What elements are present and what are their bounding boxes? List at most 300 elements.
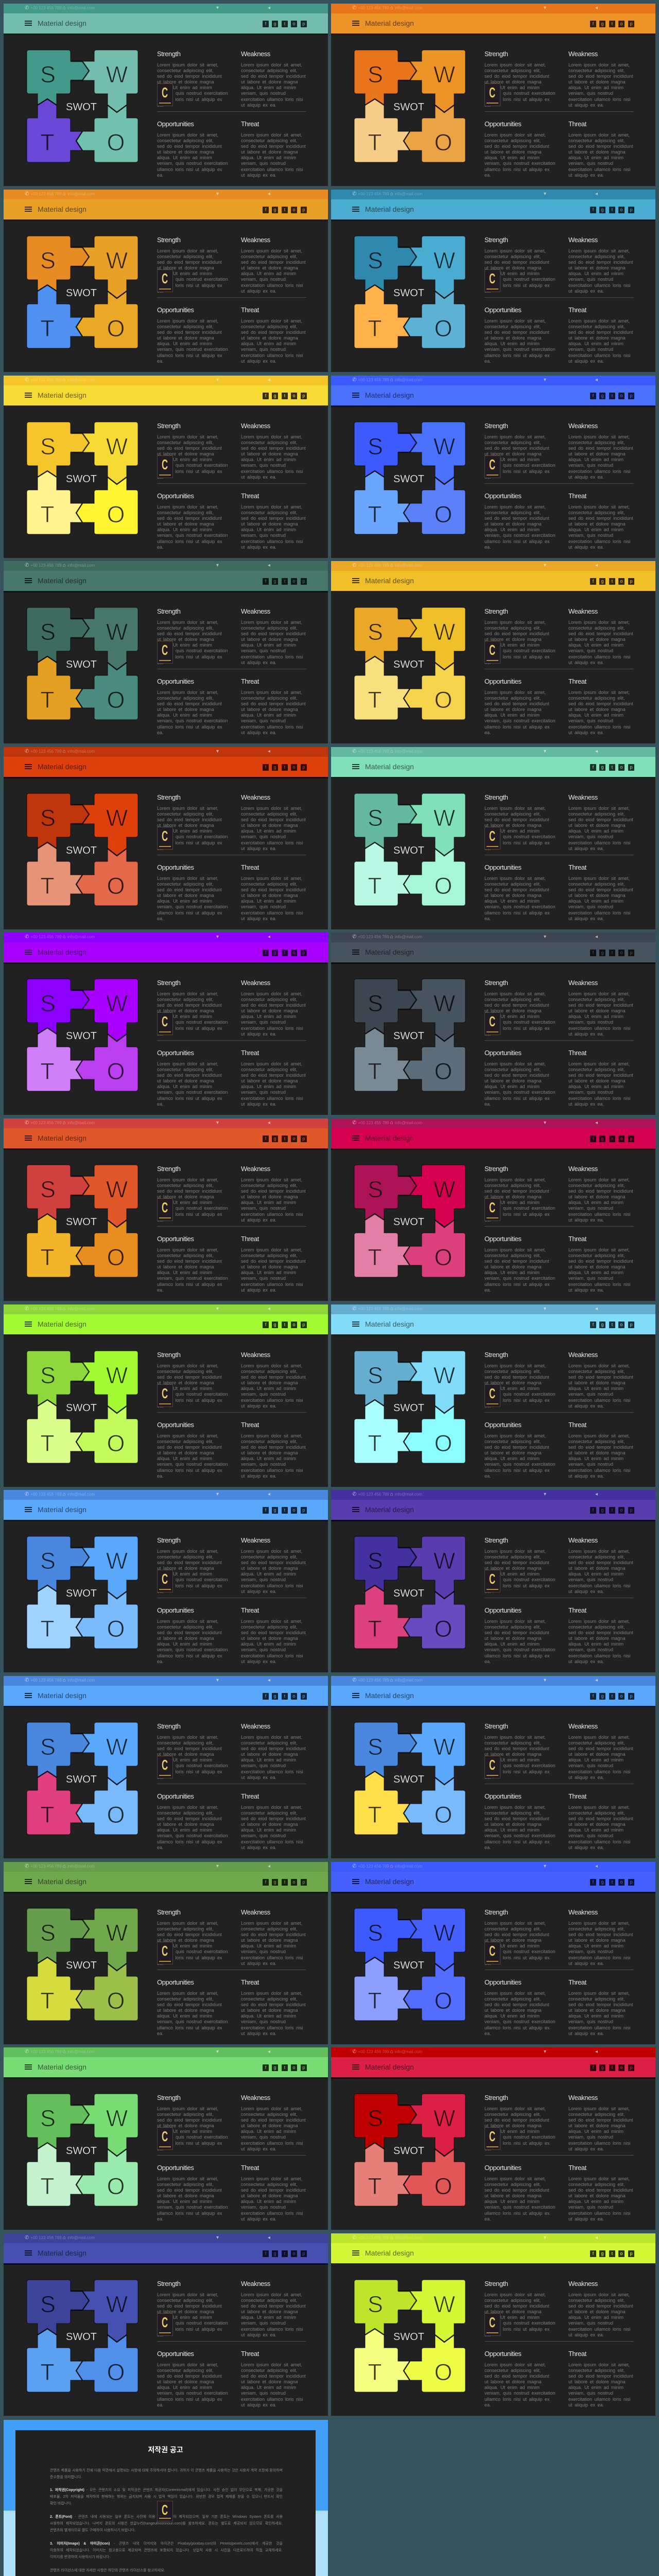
threat text: Lorem ipsum dolor sit amet, xyxy=(568,1991,630,1996)
weakness text: consectetur adipiscing elit, xyxy=(241,625,298,631)
SWOT diagram: T xyxy=(368,1430,382,1456)
nav header: f xyxy=(593,21,594,26)
nav header xyxy=(331,199,655,221)
top contact bar xyxy=(4,190,328,199)
opportunities text: ut labore et dolore magna xyxy=(484,2379,542,2384)
threat text: exercitation ullamco loris nisi xyxy=(241,724,303,730)
SWOT diagram xyxy=(26,49,138,163)
strength text: aliqua. Ut enim ad minim xyxy=(157,2315,212,2320)
top contact bar xyxy=(4,747,328,757)
threat text: Threat xyxy=(568,120,586,128)
threat text: ut labore et dolore magna xyxy=(568,1450,626,1455)
watermark badge xyxy=(157,455,173,478)
watermark badge: C xyxy=(489,84,496,100)
strength text: sed do eiod tempor incididunt xyxy=(157,446,222,451)
weakness text: exercitation ullamco loris nisi xyxy=(568,1955,631,1960)
top contact bar: ◂ xyxy=(595,749,598,754)
weakness text: ut aliquip ex ea. xyxy=(568,2146,604,2151)
weakness text: ut aliquip ex ea. xyxy=(241,1961,276,1966)
strength text xyxy=(157,236,228,294)
weakness text xyxy=(241,2094,318,2157)
threat text xyxy=(568,1421,646,1484)
weakness text: Weakness xyxy=(241,1722,270,1730)
threat text: consectetur adipiscing elit, xyxy=(568,1253,625,1258)
weakness text: aliqua. Ut enim ad minim xyxy=(568,457,623,462)
SWOT diagram: S xyxy=(368,2291,383,2317)
opportunities text: ut labore et dolore magna xyxy=(484,707,542,712)
top contact bar: ▾ xyxy=(216,377,219,383)
SWOT diagram xyxy=(24,976,143,1097)
watermark badge xyxy=(157,827,173,850)
top contact bar xyxy=(331,1490,655,1500)
weakness text: exercitation ullamco loris nisi xyxy=(241,840,303,845)
weakness text: veniam, quis nostrud xyxy=(568,277,613,282)
SWOT diagram xyxy=(24,1906,143,2027)
threat text: sed do eiod tempor incididunt xyxy=(568,2374,633,2379)
strength text: veniam, quis nostrud exercitation xyxy=(484,1206,556,1211)
strength text: ut labore et dolore magna xyxy=(157,2309,214,2314)
strength text: aliqua. Ut enim ad minim xyxy=(157,642,212,648)
SWOT diagram: W xyxy=(106,619,128,645)
watermark badge xyxy=(157,2501,173,2521)
weakness text: sed do eiod tempor incididunt xyxy=(568,817,633,822)
nav header xyxy=(4,1500,328,1521)
weakness text: veniam, quis nostrud xyxy=(241,648,286,653)
threat text: aliqua. Ut enim ad minim xyxy=(241,713,296,718)
opportunities text xyxy=(157,2164,234,2227)
SWOT diagram: O xyxy=(107,1988,125,2014)
SWOT diagram: O xyxy=(434,1988,453,2014)
opportunities text: ullamco loris nisi ut aliquip ex xyxy=(484,2025,550,2030)
weakness text: ut labore et dolore magna xyxy=(241,1380,298,1385)
strength text: aliqua. Ut enim ad minim xyxy=(484,642,540,648)
weakness text: Lorem ipsum dolor sit amet, xyxy=(241,1363,302,1368)
strength text: sed do eiod tempor incididunt xyxy=(484,74,549,79)
opportunities text: veniam, quis nostrud exercitation xyxy=(157,2205,228,2210)
weakness text: Lorem ipsum dolor sit amet, xyxy=(568,434,630,439)
opportunities text: ullamco loris nisi ut aliquip ex xyxy=(484,1282,550,1287)
threat text: consectetur adipiscing elit, xyxy=(568,1624,625,1630)
weakness text xyxy=(241,1908,318,1971)
weakness text: ut aliquip ex ea. xyxy=(241,474,276,480)
strength text: Strength xyxy=(157,422,181,430)
nav header: Material design xyxy=(38,1320,86,1328)
top contact bar: ◂ xyxy=(268,1306,270,1312)
weakness text: veniam, quis nostrud xyxy=(568,91,613,96)
opportunities text: aliqua. Ut enim ad minim xyxy=(484,155,540,160)
weakness text: Lorem ipsum dolor sit amet, xyxy=(241,248,302,253)
top contact bar xyxy=(331,2047,655,2057)
opportunities text: aliqua. Ut enim ad minim xyxy=(157,1827,212,1833)
threat text: exercitation ullamco loris nisi xyxy=(568,1096,631,1101)
opportunities text: ea. xyxy=(484,1659,491,1664)
weakness text: veniam, quis nostrud xyxy=(241,91,286,96)
weakness text: ut labore et dolore magna xyxy=(568,1566,626,1571)
nav header: g xyxy=(273,1879,276,1885)
weakness text: Weakness xyxy=(568,1165,598,1173)
weakness text: aliqua. Ut enim ad minim xyxy=(568,642,623,648)
strength text: consectetur adipiscing elit, xyxy=(157,625,214,631)
opportunities text: consectetur adipiscing elit, xyxy=(484,510,541,515)
top contact bar: ✆ +00 123 456 789 ⌂ info@mail.com xyxy=(352,5,422,11)
opportunities text: ullamco loris nisi ut aliquip ex xyxy=(484,910,550,916)
threat text: consectetur adipiscing elit, xyxy=(241,1253,298,1258)
opportunities text: ullamco loris nisi ut aliquip ex xyxy=(157,539,222,544)
opportunities text: ea. xyxy=(157,2031,164,2036)
nav header: o xyxy=(292,207,296,212)
threat text: sed do eiod tempor incididunt xyxy=(241,2374,306,2379)
SWOT diagram: O xyxy=(107,2359,125,2385)
weakness text: ut labore et dolore magna xyxy=(241,451,298,456)
strength text: ea. xyxy=(484,1775,491,1780)
SWOT diagram: O xyxy=(107,501,125,528)
panel: light blue SWOT slide xyxy=(4,1490,328,1672)
opportunities text: Opportunities xyxy=(484,1792,521,1800)
threat text: aliqua. Ut enim ad minim xyxy=(568,2013,623,2019)
nav header: p xyxy=(302,579,305,584)
SWOT diagram: W xyxy=(106,1920,128,1946)
opportunities text: Lorem ipsum dolor sit amet, xyxy=(484,1991,546,1996)
threat text: veniam, quis nostrud xyxy=(568,1090,613,1095)
strength text: aliqua. Ut enim ad minim xyxy=(157,1757,212,1762)
nav header: p xyxy=(302,1322,305,1327)
nav header: p xyxy=(630,579,632,584)
threat text xyxy=(241,1235,318,1298)
threat text xyxy=(568,2350,646,2413)
weakness text: aliqua. Ut enim ad minim xyxy=(568,1757,623,1762)
threat text: consectetur adipiscing elit, xyxy=(568,1067,625,1072)
strength text: ea. xyxy=(484,1031,491,1037)
threat text: aliqua. Ut enim ad minim xyxy=(241,2013,296,2019)
nav header: f xyxy=(593,579,594,584)
opportunities text xyxy=(157,1235,234,1298)
strength text: ullamco loris nisi ut aliquip ex xyxy=(157,1955,222,1960)
threat text: sed do eiod tempor incididunt xyxy=(241,2188,306,2193)
nav header: g xyxy=(273,950,276,955)
threat text: veniam, quis nostrud xyxy=(241,533,286,538)
threat text xyxy=(568,1235,646,1298)
nav header: p xyxy=(630,950,632,955)
watermark badge xyxy=(157,2313,173,2336)
SWOT diagram: SWOT xyxy=(393,287,424,299)
nav header: f xyxy=(265,2251,266,2256)
opportunities text: Opportunities xyxy=(484,1235,521,1243)
weakness text: ut labore et dolore magna xyxy=(241,2123,298,2128)
SWOT diagram: S xyxy=(40,433,56,460)
opportunities text: ut labore et dolore magna xyxy=(157,1078,214,1083)
threat text xyxy=(241,2350,318,2413)
nav header: f xyxy=(265,393,266,398)
opportunities text: Lorem ipsum dolor sit amet, xyxy=(484,2362,546,2367)
opportunities text: Lorem ipsum dolor sit amet, xyxy=(157,690,218,695)
threat text: Threat xyxy=(568,1235,586,1243)
SWOT diagram: SWOT xyxy=(393,1216,424,1228)
opportunities text: ea. xyxy=(484,730,491,735)
strength text: veniam, quis nostrud exercitation xyxy=(484,2134,556,2140)
SWOT diagram: SWOT xyxy=(66,101,97,113)
font paragraph: 콘텐츠와 별개이므로 별도 구매하여 사용하시기 바랍니다. xyxy=(50,2529,135,2532)
weakness text: aliqua. Ut enim ad minim xyxy=(241,1200,296,1205)
strength text: ea. xyxy=(157,289,164,294)
strength text: Lorem ipsum dolor sit amet, xyxy=(157,248,218,253)
opportunities text: sed do eiod tempor incididunt xyxy=(484,516,549,521)
nav header: o xyxy=(620,950,623,955)
panel: violet SWOT slide xyxy=(4,933,328,1115)
SWOT diagram xyxy=(24,1348,143,1469)
weakness text: consectetur adipiscing elit, xyxy=(241,68,298,73)
weakness text: sed do eiod tempor incididunt xyxy=(568,1375,633,1380)
threat text: Threat xyxy=(241,306,259,314)
threat text: consectetur adipiscing elit, xyxy=(241,510,298,515)
strength text xyxy=(157,607,228,665)
weakness text: Weakness xyxy=(568,607,598,615)
threat text: consectetur adipiscing elit, xyxy=(241,1624,298,1630)
opportunities text: ea. xyxy=(157,2402,164,2408)
SWOT diagram xyxy=(352,2277,470,2398)
top contact bar: ▾ xyxy=(544,1863,546,1869)
weakness text: ut labore et dolore magna xyxy=(241,2309,298,2314)
threat text: sed do eiod tempor incididunt xyxy=(241,701,306,706)
strength text: sed do eiod tempor incididunt xyxy=(157,1375,222,1380)
SWOT diagram: T xyxy=(40,129,55,156)
threat text xyxy=(241,1792,318,1855)
weakness text: Lorem ipsum dolor sit amet, xyxy=(568,248,630,253)
SWOT diagram: SWOT xyxy=(66,845,97,856)
top contact bar: ✆ +00 123 456 789 ⌂ info@mail.com xyxy=(25,563,95,568)
weakness text: sed do eiod tempor incididunt xyxy=(241,1932,306,1937)
opportunities text: sed do eiod tempor incididunt xyxy=(157,1073,222,1078)
threat text: Threat xyxy=(241,492,259,500)
SWOT diagram: O xyxy=(107,1058,125,1084)
strength text: veniam, quis nostrud exercitation xyxy=(484,1392,556,1397)
SWOT diagram xyxy=(26,421,138,535)
threat text: sed do eiod tempor incididunt xyxy=(241,1259,306,1264)
strength text xyxy=(484,2280,562,2343)
nav header: f xyxy=(593,1136,594,1141)
threat text: ut labore et dolore magna xyxy=(568,2379,626,2384)
nav header: t xyxy=(612,207,613,212)
opportunities text: ullamco loris nisi ut aliquip ex xyxy=(157,1839,222,1844)
watermark badge xyxy=(157,1570,173,1592)
strength text: ut labore et dolore magna xyxy=(484,1380,542,1385)
nav header: f xyxy=(265,2065,266,2070)
threat text: Lorem ipsum dolor sit amet, xyxy=(241,1805,302,1810)
nav header: g xyxy=(601,1322,603,1327)
nav header xyxy=(331,2243,655,2265)
top contact bar: ◂ xyxy=(595,934,598,940)
threat text: aliqua. Ut enim ad minim xyxy=(241,1084,296,1089)
threat text: Threat xyxy=(568,1421,586,1429)
weakness text: ut aliquip ex ea. xyxy=(568,846,604,851)
strength text: ea. xyxy=(157,1589,164,1594)
weakness text: consectetur adipiscing elit, xyxy=(568,1183,625,1188)
SWOT diagram xyxy=(352,1720,470,1841)
top contact bar: ◂ xyxy=(595,377,598,383)
threat text: consectetur adipiscing elit, xyxy=(241,1810,298,1816)
threat text: ut labore et dolore magna xyxy=(241,893,298,898)
weakness text xyxy=(241,1351,318,1414)
top contact bar: ◂ xyxy=(595,2235,598,2241)
threat text: ut aliquip ex ea. xyxy=(568,1845,604,1850)
nav header: g xyxy=(273,1507,276,1513)
SWOT diagram: O xyxy=(434,315,453,342)
strength text: Lorem ipsum dolor sit amet, xyxy=(484,991,546,996)
nav header: p xyxy=(630,1693,632,1699)
weakness text: exercitation ullamco loris nisi xyxy=(241,654,303,659)
weakness text xyxy=(568,1908,646,1971)
opportunities text: Opportunities xyxy=(157,1049,194,1057)
watermark badge xyxy=(157,641,173,664)
opportunities text: ullamco loris nisi ut aliquip ex xyxy=(484,167,550,172)
SWOT diagram: S xyxy=(368,2105,383,2131)
threat text: ut labore et dolore magna xyxy=(568,707,626,712)
threat text: sed do eiod tempor incididunt xyxy=(568,2002,633,2007)
threat text: ut aliquip ex ea. xyxy=(241,1287,276,1293)
opportunities text: aliqua. Ut enim ad minim xyxy=(157,1641,212,1647)
opportunities text: ullamco loris nisi ut aliquip ex xyxy=(157,910,222,916)
opportunities text: consectetur adipiscing elit, xyxy=(484,1067,541,1072)
SWOT diagram xyxy=(354,235,466,349)
weakness text: sed do eiod tempor incididunt xyxy=(241,2303,306,2309)
nav header: p xyxy=(302,2251,305,2256)
opportunities text: ullamco loris nisi ut aliquip ex xyxy=(484,724,550,730)
opportunities text: ea. xyxy=(157,545,164,550)
threat text: aliqua. Ut enim ad minim xyxy=(568,1456,623,1461)
nav header: p xyxy=(302,393,305,398)
nav header: g xyxy=(273,579,276,584)
top contact bar: ✆ +00 123 456 789 ⌂ info@mail.com xyxy=(25,1306,95,1312)
opportunities text: sed do eiod tempor incididunt xyxy=(484,887,549,892)
strength text: ullamco loris nisi ut aliquip ex xyxy=(484,840,550,845)
weakness text: aliqua. Ut enim ad minim xyxy=(241,828,296,834)
weakness text xyxy=(241,422,306,480)
watermark badge: C xyxy=(489,1943,496,1959)
opportunities text: aliqua. Ut enim ad minim xyxy=(157,341,212,346)
SWOT diagram: S xyxy=(368,805,383,831)
nav header: Material design xyxy=(38,577,86,585)
strength text: ullamco loris nisi ut aliquip ex xyxy=(484,1955,550,1960)
strength text: Lorem ipsum dolor sit amet, xyxy=(157,2292,218,2297)
strength text: ullamco loris nisi ut aliquip ex xyxy=(484,283,550,288)
strength text: consectetur adipiscing elit, xyxy=(484,1740,541,1745)
weakness text: veniam, quis nostrud xyxy=(241,1020,286,1025)
weakness text: ut labore et dolore magna xyxy=(568,1752,626,1757)
weakness text: Lorem ipsum dolor sit amet, xyxy=(241,62,302,67)
opportunities text: ut labore et dolore magna xyxy=(484,2193,542,2198)
threat text: sed do eiod tempor incididunt xyxy=(568,2188,633,2193)
weakness text xyxy=(241,979,318,1042)
strength text: veniam, quis nostrud exercitation xyxy=(157,2320,228,2326)
SWOT diagram: SWOT xyxy=(393,101,424,113)
opportunities text: ea. xyxy=(484,2216,491,2222)
opportunities text: ullamco loris nisi ut aliquip ex xyxy=(157,1468,222,1473)
strength text: ea. xyxy=(484,1403,491,1409)
weakness text: Weakness xyxy=(568,2094,598,2102)
strength text: sed do eiod tempor incididunt xyxy=(157,2117,222,2123)
strength text: sed do eiod tempor incididunt xyxy=(157,74,222,79)
weakness text: exercitation ullamco loris nisi xyxy=(241,1583,303,1588)
opportunities text: Lorem ipsum dolor sit amet, xyxy=(157,2362,218,2367)
nav header: t xyxy=(284,950,285,955)
nav header: f xyxy=(593,2251,594,2256)
weakness text xyxy=(568,236,633,294)
opportunities text xyxy=(157,1421,234,1484)
threat text: exercitation ullamco loris nisi xyxy=(568,167,631,172)
threat text: aliqua. Ut enim ad minim xyxy=(241,527,296,532)
weakness text: aliqua. Ut enim ad minim xyxy=(568,1571,623,1577)
opportunities text: ea. xyxy=(484,916,491,921)
weakness text: ut aliquip ex ea. xyxy=(241,289,276,294)
SWOT diagram: T xyxy=(40,1616,55,1642)
SWOT diagram: T xyxy=(40,2173,55,2199)
weakness text: sed do eiod tempor incididunt xyxy=(568,260,633,265)
SWOT diagram: W xyxy=(433,433,456,460)
watermark badge xyxy=(157,1198,173,1221)
strength text: aliqua. Ut enim ad minim xyxy=(157,1200,212,1205)
nav header: Material design xyxy=(38,205,86,213)
watermark badge xyxy=(157,269,173,292)
SWOT diagram: W xyxy=(106,61,128,88)
SWOT diagram: SWOT xyxy=(393,659,424,670)
strength text: Lorem ipsum dolor sit amet, xyxy=(157,1735,218,1740)
weakness text: sed do eiod tempor incididunt xyxy=(568,1932,633,1937)
threat text: ut labore et dolore magna xyxy=(241,1264,298,1269)
weakness text: sed do eiod tempor incididunt xyxy=(568,1746,633,1751)
threat text: veniam, quis nostrud xyxy=(241,1462,286,1467)
weakness text: sed do eiod tempor incididunt xyxy=(241,1189,306,1194)
opportunities text: ea. xyxy=(157,730,164,735)
opportunities text: ea. xyxy=(157,1101,164,1107)
top contact bar: ✆ +00 123 456 789 ⌂ info@mail.com xyxy=(25,377,95,383)
SWOT diagram: O xyxy=(434,1058,453,1084)
threat text: aliqua. Ut enim ad minim xyxy=(241,899,296,904)
threat text xyxy=(241,306,306,364)
opportunities text: Lorem ipsum dolor sit amet, xyxy=(157,504,218,510)
threat text: ut aliquip ex ea. xyxy=(568,730,604,735)
opportunities text: ea. xyxy=(157,2216,164,2222)
weakness text: ut aliquip ex ea. xyxy=(241,1217,276,1223)
strength text: ullamco loris nisi ut aliquip ex xyxy=(484,1583,550,1588)
nav header: t xyxy=(284,21,285,26)
threat text: consectetur adipiscing elit, xyxy=(241,324,298,329)
intro paragraph: 콘텐츠 제품을 사용하기 전에 다음 약관에서 설명되는 사항에 대해 주의하셔야 합니다. 귀하가 이 콘텐츠 제품을 사용하는 것은 사용자 계약 조항에 동의하며 xyxy=(50,2469,283,2472)
nav header xyxy=(4,13,328,35)
nav header xyxy=(331,1500,655,1521)
top contact bar: ▾ xyxy=(216,1492,219,1497)
weakness text: ut labore et dolore magna xyxy=(241,823,298,828)
top contact bar xyxy=(331,1304,655,1314)
nav header: p xyxy=(302,207,305,212)
opportunities text: Opportunities xyxy=(484,1606,521,1614)
opportunities text: veniam, quis nostrud exercitation xyxy=(484,533,556,538)
watermark badge: C xyxy=(489,2314,496,2330)
top contact bar xyxy=(4,561,328,571)
nav header: t xyxy=(284,393,285,398)
SWOT diagram: S xyxy=(40,61,56,88)
threat text: sed do eiod tempor incididunt xyxy=(568,1259,633,1264)
threat text: exercitation ullamco loris nisi xyxy=(568,2397,631,2402)
weakness text: veniam, quis nostrud xyxy=(568,2320,613,2326)
nav header: g xyxy=(601,579,603,584)
opportunities text: consectetur adipiscing elit, xyxy=(157,2368,214,2373)
opportunities text: aliqua. Ut enim ad minim xyxy=(484,1641,540,1647)
strength text: ea. xyxy=(157,1031,164,1037)
strength text: veniam, quis nostrud exercitation xyxy=(484,1949,556,1954)
nav header: Material design xyxy=(38,1877,86,1886)
strength text xyxy=(484,607,556,665)
strength text: ut labore et dolore magna xyxy=(157,451,214,456)
threat text: Threat xyxy=(241,1792,259,1800)
